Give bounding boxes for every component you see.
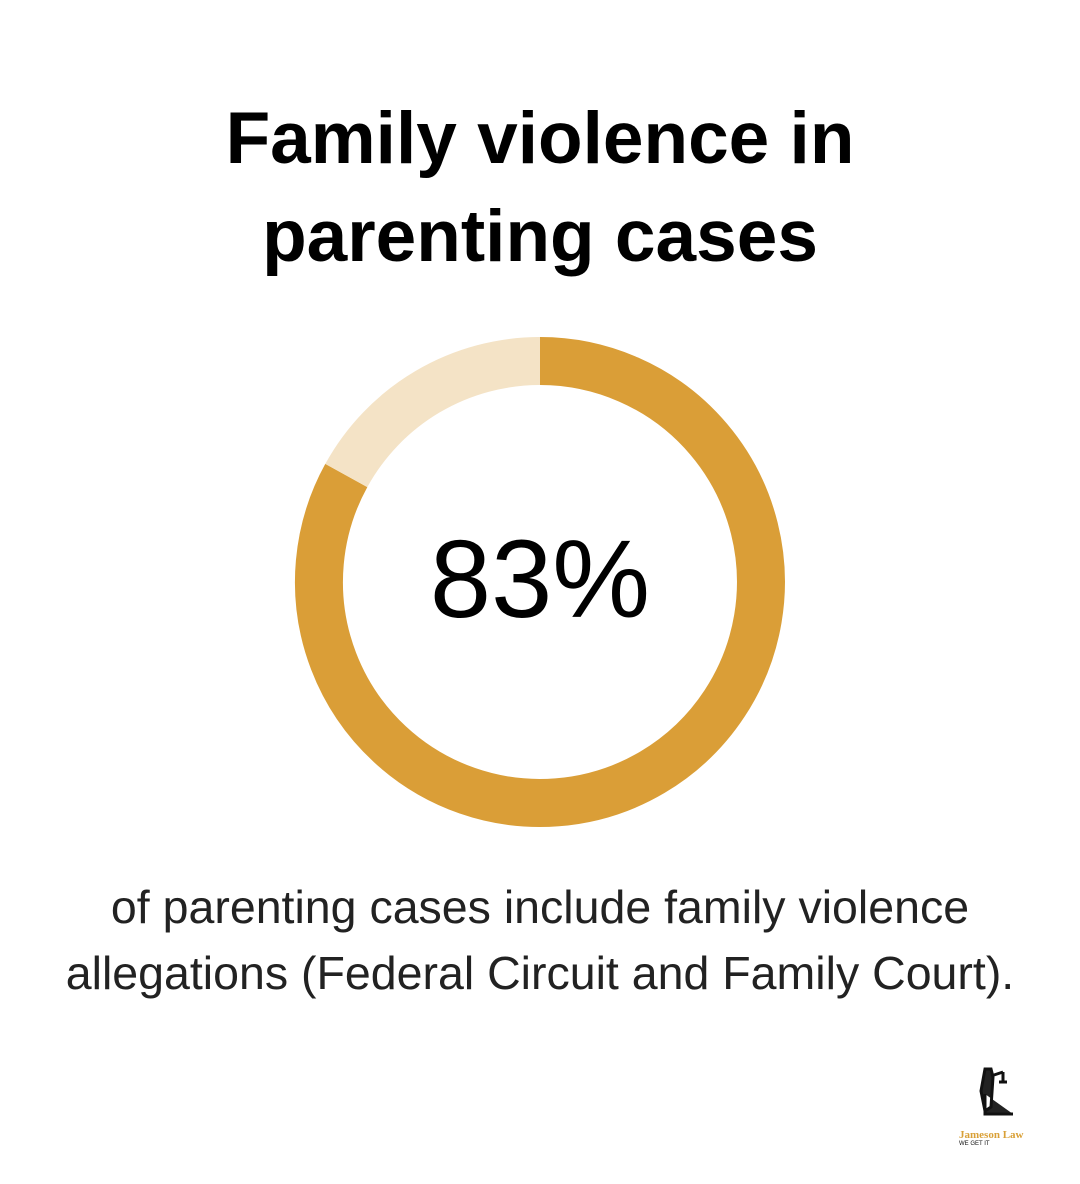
stat value: 83% <box>430 518 650 641</box>
title: Family violence in <box>226 98 854 179</box>
caption: of parenting cases include family violence <box>111 881 969 933</box>
caption <box>66 881 1014 999</box>
logo <box>959 1068 1024 1147</box>
title <box>226 98 854 277</box>
logo: WE GET IT <box>959 1141 990 1147</box>
logo: Jameson Law <box>959 1129 1023 1141</box>
caption: allegations (Federal Circuit and Family Court). <box>66 947 1014 999</box>
title: parenting cases <box>262 196 818 277</box>
